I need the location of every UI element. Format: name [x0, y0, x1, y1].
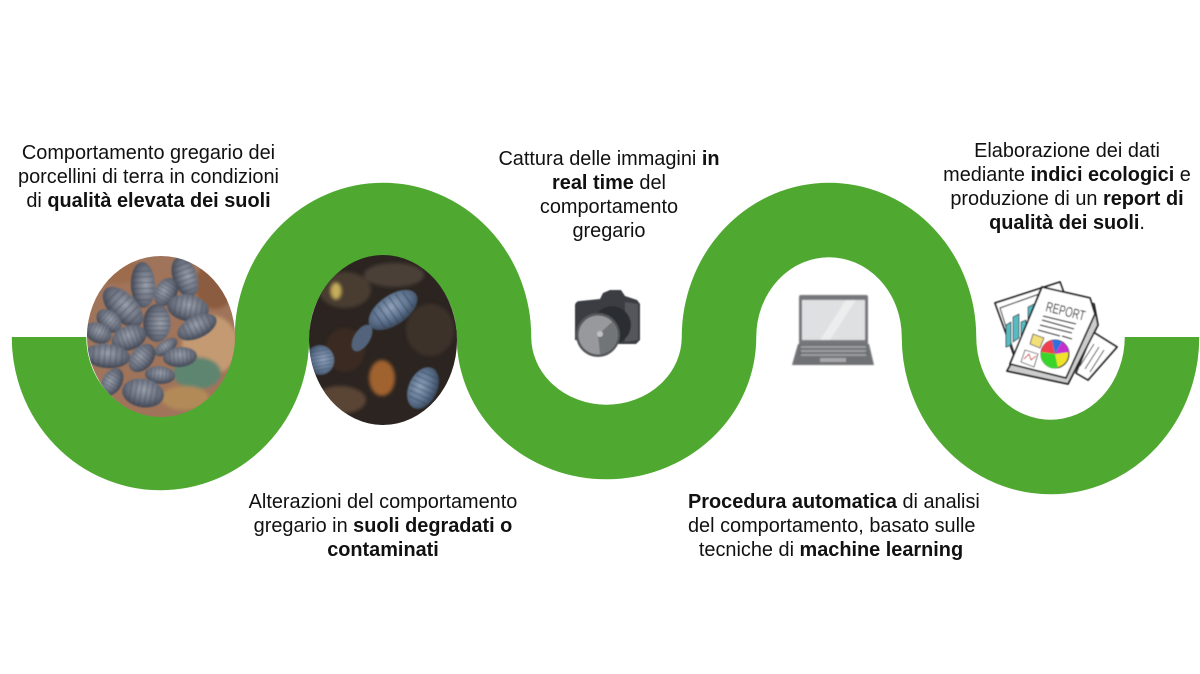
text: step 2: gregario in suoli degradati o	[254, 515, 512, 537]
icon: camera	[575, 290, 640, 357]
photo: gregarious woodlice on good soil	[81, 253, 238, 419]
text: step 4: tecniche di machine learning	[699, 539, 963, 561]
text: step 2	[248, 491, 517, 561]
text: step 5: qualità dei suoli.	[989, 212, 1145, 234]
text: step 1	[18, 142, 279, 212]
text: step 4: Procedura automatica di analisi	[688, 491, 980, 513]
text: step 3: real time del	[552, 172, 666, 194]
text: step 4	[688, 491, 980, 561]
text: step 5: mediante indici ecologici e	[943, 164, 1191, 186]
text: step 3	[498, 148, 720, 242]
text: step 3: comportamento	[540, 196, 678, 218]
text: step 1: porcellini di terra in condizioni	[18, 166, 279, 188]
icon: report	[995, 282, 1117, 384]
photo: woodlice on degraded soil	[303, 253, 459, 428]
text: step 5: produzione di un report di	[950, 188, 1184, 210]
icon: report: REPORT	[1044, 298, 1087, 324]
text: step 1: Comportamento gregario dei	[22, 142, 275, 164]
icon: laptop	[792, 295, 874, 365]
text: step 4: del comportamento, basato sulle	[688, 515, 975, 537]
green wave path	[49, 220, 1162, 457]
text: step 5	[943, 140, 1191, 234]
text: step 2: Alterazioni del comportamento	[249, 491, 517, 513]
text: step 3: Cattura delle immagini in	[498, 148, 720, 170]
text: step 1: di qualità elevata dei suoli	[26, 190, 271, 212]
text: step 5: Elaborazione dei dati	[974, 140, 1160, 162]
text: step 3: gregario	[572, 220, 645, 242]
text: step 2: contaminati	[327, 539, 439, 561]
